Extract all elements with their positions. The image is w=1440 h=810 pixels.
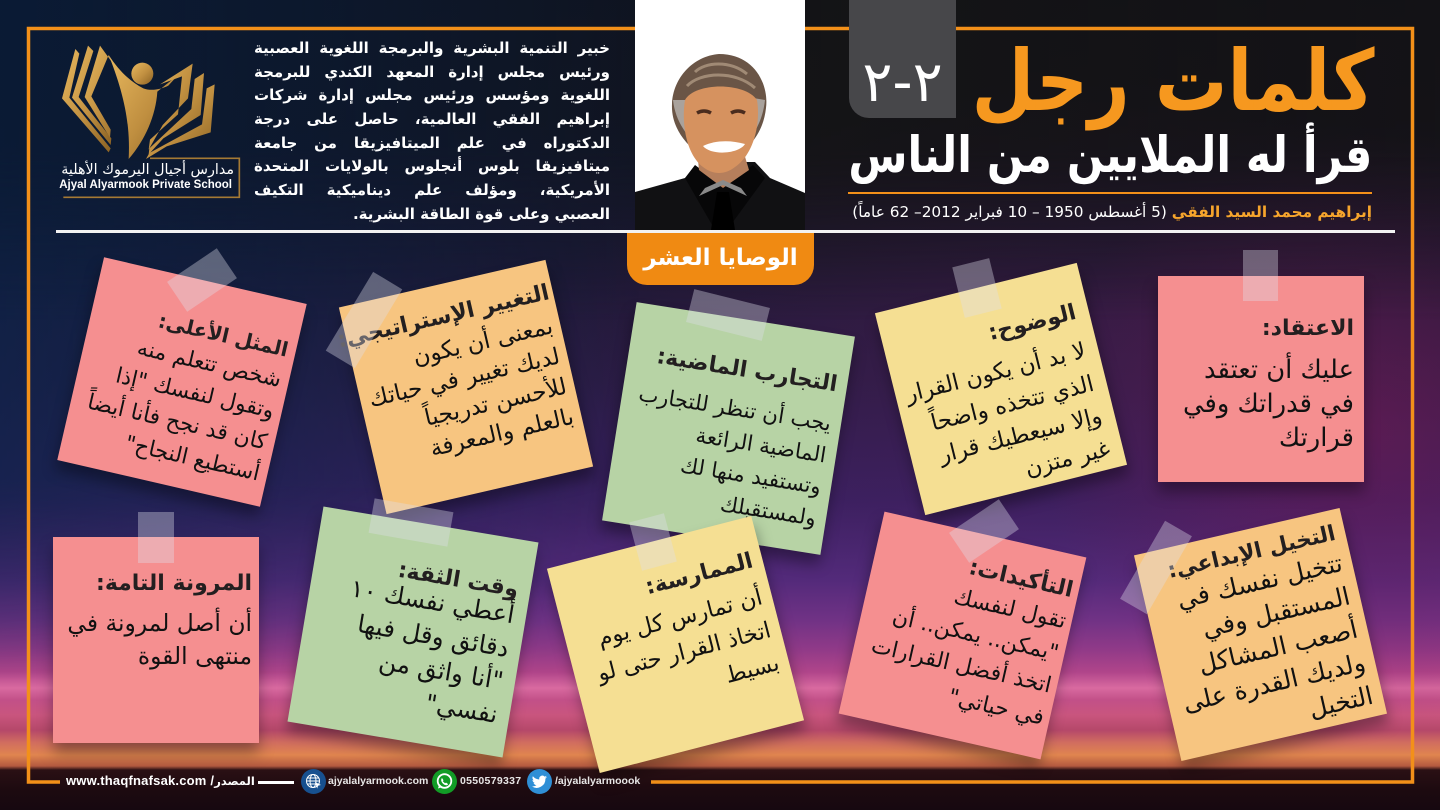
note: ideal model: كان قد نجح فأنا أيضاً [85, 390, 269, 455]
note: confidence time: وقت الثقة: [396, 558, 520, 603]
note: creative imagination [1133, 508, 1387, 761]
note: practice: اتخاذ القرار حتى لو [595, 616, 773, 686]
portrait photo [635, 0, 805, 230]
note: total flexibility: المرونة التامة: [96, 570, 252, 596]
note: practice: أن تمارس كل يوم [595, 583, 765, 651]
note: past experiences: الماضية الرائعة [693, 423, 827, 468]
note: belief: عليك أن تعتقد [1204, 354, 1354, 384]
biography paragraph: اللغوية ومؤسس ورئيس مجلس إدارة شركات [254, 86, 610, 104]
note: strategic change: بمعنى أن يكون [410, 313, 555, 371]
neck [697, 150, 749, 188]
note: past experiences: يجب أن تنظر للتجارب [636, 381, 832, 436]
note: creative imagination: أصعب المشاكل [1195, 614, 1360, 679]
note: clarity: وإلا سيعطيك قرار [937, 403, 1105, 468]
note: clarity [875, 263, 1127, 515]
note: practice [547, 515, 804, 773]
biography paragraph: إبراهيم الفقي العالمية، حاصل على درجة [254, 110, 610, 128]
icon: whatsapp [432, 769, 457, 794]
note: clarity: غير متزن [1022, 435, 1113, 482]
subtitle: قرأ له الملايين من الناس [848, 126, 1372, 184]
note: affirmations: التأكيدات: [966, 555, 1075, 602]
note: strategic change [338, 260, 593, 514]
note: affirmations: في حياتي" [945, 684, 1046, 730]
note: affirmations: تقول لنفسك [951, 584, 1068, 634]
note: clarity: الوضوح: [986, 300, 1079, 346]
note: strategic change: التغيير الإستراتيجي: [335, 280, 551, 353]
note: total flexibility [53, 537, 259, 743]
logo frame [63, 158, 239, 197]
note: belief: الاعتقاد: [1262, 316, 1354, 341]
note: confidence time: دقائق وقل فيها [355, 608, 511, 662]
logo book pages left [62, 46, 215, 159]
edition number: ٢-٢ [862, 50, 943, 115]
title: كلمات رجل [972, 32, 1375, 130]
logo figure [109, 55, 179, 159]
collar and tie [699, 180, 747, 196]
note: total flexibility: أن أصل لمرونة في [67, 608, 252, 636]
footer source: www.thaqfnafsak.com /المصدر [66, 773, 255, 788]
note: ideal model: أستطيع النجاح" [123, 431, 262, 486]
biography paragraph [254, 39, 610, 223]
note: past experiences [602, 302, 854, 554]
hair [672, 54, 766, 155]
school name arabic: مدارس أجيال اليرموك الأهلية [61, 162, 234, 178]
school name english: Ajyal Alyarmook Private School [59, 179, 232, 191]
heading tab: the ten commandments: الوصايا العشر [643, 245, 798, 271]
note: strategic change: للأحسن تدريجياً [422, 374, 569, 432]
school logo [62, 46, 240, 198]
footer rule [258, 781, 294, 784]
white divider [56, 230, 1395, 232]
note: past experiences: التجارب الماضية: [654, 344, 839, 397]
note: ideal model: شخص تتعلم منه [135, 335, 284, 393]
icon: twitter [527, 769, 552, 794]
note: affirmations: "يمكن.. يمكن.. أن [889, 604, 1061, 666]
biography paragraph: الأمريكية، ومؤلف علم ديناميكية التكيف [254, 181, 610, 199]
note: creative imagination: ولديك القدرة على [1179, 647, 1367, 717]
note: confidence time: "أنا واثق من [377, 646, 506, 695]
note: strategic change: لديك تغيير في حياتك [366, 344, 562, 413]
note: creative imagination: المستقبل وفي [1199, 581, 1352, 643]
icon: globe [301, 769, 326, 794]
note: belief: في قدراتك وفي [1183, 388, 1354, 418]
logo book pages right [149, 64, 193, 150]
biography paragraph: العصبي وعلى قوة الطاقة البشرية. [353, 205, 610, 223]
note: ideal model: المثل الأعلى: [156, 308, 291, 362]
note: ideal model [57, 257, 307, 507]
footer website: ajyalalyarmook.com [328, 775, 428, 787]
edition tab [849, 0, 956, 118]
note: ideal model: وتقول لنفسك "إذا [113, 363, 276, 424]
note: past experiences: وتستفيد منها لك [678, 453, 822, 500]
heading tab: the ten commandments [627, 233, 814, 285]
note: confidence time [288, 507, 538, 757]
note: creative imagination: التخيل الإبداعي: [1165, 520, 1337, 583]
note: total flexibility: منتهى القوة [138, 642, 252, 670]
biography paragraph: ميتافيزيقا بلوس أنجلوس بالولايات المتحدة [254, 157, 610, 175]
note: belief [1158, 276, 1364, 482]
note: past experiences: ولمستقبلك [718, 491, 817, 531]
note: confidence time: نفسي" [423, 688, 500, 728]
biography paragraph: الدكتوراه في علم الميتافيزيقا من جامعة [254, 134, 610, 152]
biography paragraph: خبير التنمية البشرية والبرمجة اللغوية العصبية [254, 39, 610, 57]
note: clarity: لا بد أن يكون القرار [903, 338, 1088, 408]
jacket [635, 162, 805, 230]
note: strategic change: بالعلم والمعرفة [427, 404, 576, 462]
note: practice: بسيط [722, 649, 782, 688]
note: creative imagination: التخيل [1305, 680, 1375, 723]
biography paragraph: ورئيس مجلس إدارة المعهد الكندي للبرمجة [254, 63, 610, 81]
biography line: إبراهيم محمد السيد الفقي (5 أغسطس 1950 – 10 فبراير 2012– 62 عاماً) [852, 203, 1372, 221]
note: belief: قرارتك [1279, 422, 1354, 452]
note: creative imagination: تتخيل نفسك في [1174, 548, 1345, 614]
footer phone: 0550579337 [460, 775, 521, 787]
note: affirmations [838, 511, 1086, 759]
note: affirmations: اتخذ أفضل القرارات [868, 633, 1053, 698]
smile [703, 141, 745, 153]
note: confidence time: أعطي نفسك ١٠ [348, 573, 517, 629]
face [684, 86, 758, 173]
footer twitter handle: /ajyalalyarmoook [555, 775, 640, 787]
note: practice: الممارسة: [643, 548, 756, 600]
subtitle rule [848, 192, 1372, 194]
note: clarity: الذي تتخذه واضحاً [928, 370, 1096, 436]
